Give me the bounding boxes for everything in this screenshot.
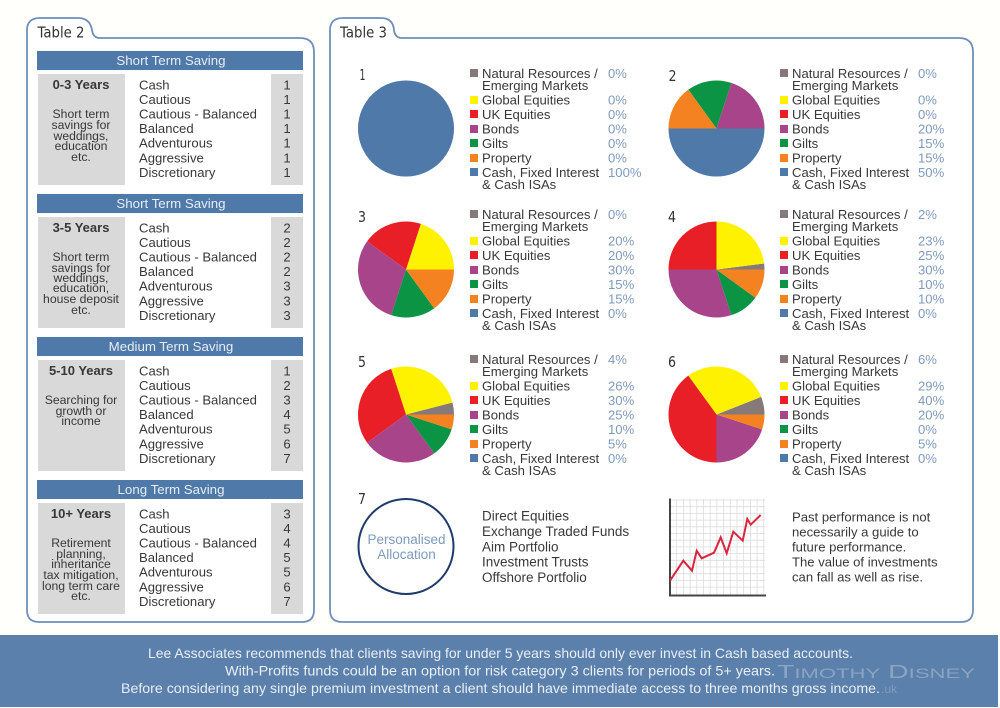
- legend 1: Global Equities: [482, 92, 571, 108]
- section: 5-10 years: Cautious - Balanced: [139, 392, 257, 408]
- section: 3-5 years: Short term: [53, 250, 109, 264]
- section: 10+ years: 4: [283, 521, 291, 536]
- allocation 5: 5: [358, 353, 366, 371]
- heading: table 3: Table 3: [339, 24, 387, 42]
- legend 5: Cash, Fixed Interest: [482, 451, 600, 466]
- legend 2: 50%: [918, 165, 945, 180]
- section: 5-10 years: Balanced: [139, 407, 194, 422]
- section: 5-10 years: 5-10 Years: [49, 363, 113, 378]
- section: 5-10 years: Discretionary: [139, 451, 216, 466]
- section: 10+ years: 3: [283, 506, 291, 522]
- section: 0-3 years: 1: [283, 136, 291, 150]
- section: 0-3 years: Aggressive: [139, 150, 204, 166]
- line chart icon: [670, 498, 766, 596]
- section: 5-10 years: [37, 337, 303, 471]
- section: 0-3 years: etc.: [71, 150, 91, 164]
- allocation 4: [668, 207, 945, 333]
- legend 6: Global Equities: [792, 378, 881, 394]
- section: 3-5 years: Cautious - Balanced: [139, 250, 257, 264]
- section: 10+ years: Retirement: [51, 536, 111, 550]
- legend 5: Emerging Markets: [482, 364, 589, 379]
- legend 2: & Cash ISAs: [792, 177, 867, 192]
- section: 10+ years: 7: [283, 594, 291, 609]
- legend 4: [780, 207, 945, 333]
- performance disclaimer: can fall as well as rise.: [792, 570, 923, 584]
- legend 2: Cash, Fixed Interest: [792, 165, 910, 180]
- legend 6: UK Equities: [792, 393, 861, 408]
- legend 1: 0%: [608, 136, 627, 151]
- section: 5-10 years: 4: [283, 407, 291, 422]
- legend 5: UK Equities: [482, 393, 551, 408]
- legend 3: Cash, Fixed Interest: [482, 306, 600, 321]
- section: 10+ years: Cash: [139, 506, 170, 522]
- footer banner: [0, 635, 998, 707]
- performance disclaimer: Past performance is not: [792, 510, 931, 524]
- section: 3-5 years: education,: [53, 281, 109, 295]
- legend 5: 30%: [608, 393, 635, 408]
- section: 3-5 years: house deposit: [43, 292, 120, 306]
- legend 4: & Cash ISAs: [792, 318, 867, 333]
- legend 6: 40%: [918, 393, 945, 408]
- allocation 3: [358, 207, 635, 333]
- legend 6: & Cash ISAs: [792, 463, 867, 478]
- legend 6: 0%: [918, 451, 937, 466]
- section: 0-3 years: Cautious - Balanced: [139, 106, 257, 122]
- section: 10+ years: 4: [283, 536, 291, 550]
- section: 10+ years: 5: [283, 550, 291, 565]
- legend 3: 20%: [608, 248, 635, 263]
- allocation 6: [668, 352, 945, 478]
- investment list: Investment Trusts: [482, 554, 589, 570]
- pie chart 2: [668, 81, 764, 176]
- legend 1: Natural Resources /: [482, 66, 598, 81]
- section: 3-5 years: etc.: [71, 303, 91, 317]
- legend 4: Cash, Fixed Interest: [792, 306, 910, 321]
- investment list: Direct Equities: [482, 508, 569, 524]
- legend 1: 0%: [608, 107, 627, 122]
- footer text: [121, 645, 880, 696]
- allocation 6: 6: [668, 353, 676, 371]
- section: 3-5 years: 3-5 Years: [53, 220, 109, 235]
- pie chart 4: [668, 222, 764, 317]
- legend 2: UK Equities: [792, 107, 861, 122]
- section: 3-5 years: Short Term Saving: [116, 196, 226, 211]
- section: 5-10 years: 1: [283, 364, 291, 378]
- legend 5: Property: [482, 436, 532, 452]
- legend 3: Bonds: [482, 262, 520, 278]
- section: 5-10 years: Adventurous: [139, 422, 213, 436]
- investment list: Exchange Traded Funds: [482, 524, 629, 539]
- section: 5-10 years: 7: [283, 451, 291, 466]
- legend 1: 0%: [608, 92, 627, 108]
- pie chart 3: [358, 222, 454, 317]
- legend 1: 100%: [608, 165, 642, 180]
- section: 0-3 years: 1: [283, 121, 291, 136]
- footer text: Before considering any single premium investment a client should have immediate access to three months gross income.: [121, 680, 880, 696]
- legend 2: Property: [792, 150, 842, 166]
- section: 10+ years: tax mitigation,: [43, 568, 119, 582]
- section: 10+ years: planning,: [56, 547, 106, 561]
- section: 0-3 years: 1: [283, 78, 291, 92]
- legend 3: 15%: [608, 292, 635, 306]
- section: 3-5 years: 2: [283, 264, 291, 279]
- section: 10+ years: 6: [283, 580, 291, 594]
- section: 10+ years: Balanced: [139, 550, 194, 565]
- panel: table 3: [330, 18, 973, 622]
- section: 3-5 years: Cautious: [139, 235, 191, 250]
- legend 4: 2%: [918, 207, 937, 222]
- section: 0-3 years: Discretionary: [139, 165, 216, 180]
- section: 5-10 years: Searching for: [45, 393, 117, 407]
- allocation 7: 7: [358, 490, 366, 508]
- section: 0-3 years: 1: [283, 165, 291, 180]
- legend 2: 0%: [918, 107, 937, 122]
- legend 3: Gilts: [482, 277, 509, 292]
- legend 4: 10%: [918, 277, 945, 292]
- section: 0-3 years: 1: [283, 92, 291, 107]
- legend 3: 30%: [608, 262, 635, 278]
- allocation 5: [358, 352, 635, 478]
- legend 1: & Cash ISAs: [482, 177, 557, 192]
- legend 1: Gilts: [482, 136, 509, 151]
- section: 10+ years: long term care: [42, 579, 120, 593]
- legend 1: Emerging Markets: [482, 78, 589, 93]
- legend 6: Natural Resources /: [792, 352, 908, 367]
- section: 0-3 years: 1: [283, 150, 291, 166]
- watermark: T IMOTHY D ISNEY: [777, 662, 976, 682]
- section: 3-5 years: 3: [283, 308, 291, 323]
- legend 6: Property: [792, 436, 842, 452]
- section: 0-3 years: Adventurous: [139, 136, 213, 150]
- investment list: [482, 508, 629, 585]
- legend 5: Bonds: [482, 408, 520, 422]
- legend 4: Emerging Markets: [792, 219, 899, 234]
- legend 1: [470, 66, 642, 192]
- legend 4: 0%: [918, 306, 937, 321]
- legend 2: Bonds: [792, 122, 830, 136]
- legend 5: 0%: [608, 451, 627, 466]
- legend 5: Gilts: [482, 422, 509, 437]
- legend 6: Bonds: [792, 408, 830, 422]
- legend 2: [780, 66, 945, 192]
- legend 3: & Cash ISAs: [482, 318, 557, 333]
- legend 2: 15%: [918, 150, 945, 166]
- section: 3-5 years: 2: [283, 220, 291, 236]
- performance disclaimer: The value of investments: [792, 554, 938, 570]
- section: 5-10 years: Cash: [139, 364, 170, 378]
- section: 3-5 years: Balanced: [139, 264, 194, 279]
- pie chart 1: [358, 80, 454, 176]
- section: 0-3 years: savings for: [52, 118, 110, 132]
- legend 5: Global Equities: [482, 378, 571, 394]
- footer text: Lee Associates recommends that clients saving for under 5 years should only ever invest in Cash based accounts.: [148, 645, 853, 661]
- panel: table 2: [27, 18, 314, 622]
- section: 5-10 years: income: [61, 414, 101, 428]
- section: 3-5 years: Cash: [139, 220, 170, 236]
- section: 3-5 years: 2: [283, 235, 291, 250]
- allocation 2: 2: [668, 67, 676, 85]
- section: 0-3 years: Short term: [53, 107, 109, 121]
- personalised allocation circle: Personalised: [367, 532, 446, 547]
- legend 3: [470, 207, 635, 333]
- section: 0-3 years: 1: [283, 106, 291, 122]
- section: 3-5 years: 3: [283, 278, 291, 294]
- legend 6: 5%: [918, 436, 937, 452]
- legend 5: 10%: [608, 422, 635, 437]
- allocation 1: 1: [360, 66, 366, 84]
- legend 3: Emerging Markets: [482, 219, 589, 234]
- section: 0-3 years: [37, 51, 303, 185]
- allocation 7: [358, 490, 629, 594]
- legend 4: 25%: [918, 248, 945, 263]
- section: 10+ years: Cautious: [139, 521, 191, 536]
- legend 5: Natural Resources /: [482, 352, 598, 367]
- section: 10+ years: [37, 480, 303, 614]
- performance disclaimer: [792, 510, 938, 584]
- legend 4: Gilts: [792, 277, 819, 292]
- section: 0-3 years: Cautious: [139, 92, 191, 107]
- section: 10+ years: Discretionary: [139, 594, 216, 609]
- legend 1: 0%: [608, 122, 627, 136]
- allocation 2: [668, 66, 945, 192]
- legend 1: Bonds: [482, 122, 520, 136]
- legend 5: 25%: [608, 408, 635, 422]
- legend 6: 6%: [918, 352, 937, 367]
- legend 6: 29%: [918, 378, 945, 394]
- section: 5-10 years: 2: [283, 378, 291, 393]
- legend 1: 0%: [608, 150, 627, 166]
- section: 10+ years: 10+ Years: [51, 506, 111, 521]
- legend 2: Global Equities: [792, 92, 881, 108]
- section: 3-5 years: Adventurous: [139, 278, 213, 294]
- allocation 4: 4: [668, 208, 676, 226]
- section: 5-10 years: 5: [283, 422, 291, 436]
- allocation 3: 3: [358, 208, 366, 226]
- legend 3: Property: [482, 292, 532, 306]
- personalised allocation circle: [358, 499, 454, 594]
- section: 3-5 years: 3: [283, 294, 291, 308]
- section: 3-5 years: 2: [283, 250, 291, 264]
- legend 6: Cash, Fixed Interest: [792, 451, 910, 466]
- section: 5-10 years: 6: [283, 436, 291, 452]
- watermark: .uk: [881, 682, 898, 696]
- section: 0-3 years: Balanced: [139, 121, 194, 136]
- section: 5-10 years: 3: [283, 392, 291, 408]
- section: 0-3 years: Short Term Saving: [116, 53, 226, 68]
- footer text: With-Profits funds could be an option for risk category 3 clients for periods of 5+ years.: [225, 662, 775, 678]
- section: 0-3 years: education: [55, 139, 107, 153]
- legend 3: 20%: [608, 234, 635, 248]
- section: 3-5 years: Discretionary: [139, 308, 216, 323]
- section: 3-5 years: Aggressive: [139, 294, 204, 308]
- heading: table 2: Table 2: [37, 24, 84, 42]
- legend 3: UK Equities: [482, 248, 551, 263]
- legend 2: Gilts: [792, 136, 819, 151]
- section: 10+ years: etc.: [71, 589, 91, 603]
- performance disclaimer: future performance.: [792, 540, 906, 554]
- legend 5: 5%: [608, 436, 627, 452]
- watermark: [777, 662, 976, 696]
- legend 5: 4%: [608, 352, 627, 367]
- section: 10+ years: Adventurous: [139, 564, 213, 580]
- section: 5-10 years: Cautious: [139, 378, 191, 393]
- legend 3: 15%: [608, 277, 635, 292]
- legend 4: Natural Resources /: [792, 207, 908, 222]
- legend 4: UK Equities: [792, 248, 861, 263]
- section: 10+ years: inheritance: [51, 557, 111, 571]
- allocation 1: [358, 66, 642, 192]
- legend 4: 23%: [918, 234, 945, 248]
- legend 5: [470, 352, 635, 478]
- legend 2: 20%: [918, 122, 945, 136]
- section: 0-3 years: 0-3 Years: [53, 77, 109, 92]
- legend 6: Emerging Markets: [792, 364, 899, 379]
- legend 6: [780, 352, 945, 478]
- legend 2: Emerging Markets: [792, 78, 899, 93]
- legend 1: Property: [482, 150, 532, 166]
- legend 6: Gilts: [792, 422, 819, 437]
- section: 10+ years: 5: [283, 564, 291, 580]
- section: 10+ years: Long Term Saving: [118, 482, 224, 497]
- legend 1: Cash, Fixed Interest: [482, 165, 600, 180]
- section: 10+ years: Cautious - Balanced: [139, 536, 257, 550]
- personalised allocation circle: Allocation: [377, 547, 436, 562]
- section: 10+ years: Aggressive: [139, 580, 204, 594]
- legend 4: 30%: [918, 262, 945, 278]
- legend 1: UK Equities: [482, 107, 551, 122]
- legend 4: Bonds: [792, 262, 830, 278]
- legend 2: 0%: [918, 92, 937, 108]
- legend 1: 0%: [608, 66, 627, 81]
- section: 5-10 years: Medium Term Saving: [109, 339, 233, 354]
- legend 2: 15%: [918, 136, 945, 151]
- legend 4: 10%: [918, 292, 945, 306]
- section: 5-10 years: growth or: [56, 404, 106, 418]
- legend 5: & Cash ISAs: [482, 463, 557, 478]
- section: 3-5 years: weddings,: [53, 271, 108, 285]
- legend 6: 0%: [918, 422, 937, 437]
- legend 4: Global Equities: [792, 234, 881, 248]
- legend 6: 20%: [918, 408, 945, 422]
- legend 3: Global Equities: [482, 234, 571, 248]
- legend 2: Natural Resources /: [792, 66, 908, 81]
- section: 3-5 years: savings for: [52, 261, 110, 275]
- legend 3: 0%: [608, 306, 627, 321]
- investment list: Offshore Portfolio: [482, 570, 587, 585]
- section: 0-3 years: weddings,: [53, 129, 108, 143]
- legend 3: Natural Resources /: [482, 207, 598, 222]
- investment list: Aim Portfolio: [482, 540, 559, 554]
- section: 0-3 years: Cash: [139, 78, 170, 92]
- pie chart 5: [358, 367, 454, 462]
- legend 3: 0%: [608, 207, 627, 222]
- performance disclaimer: necessarily a guide to: [792, 524, 919, 540]
- legend 4: Property: [792, 292, 842, 306]
- pie chart 6: [669, 367, 764, 462]
- legend 5: 26%: [608, 378, 635, 394]
- section: 3-5 years: [37, 194, 303, 328]
- legend 2: 0%: [918, 66, 937, 81]
- section: 5-10 years: Aggressive: [139, 436, 204, 452]
